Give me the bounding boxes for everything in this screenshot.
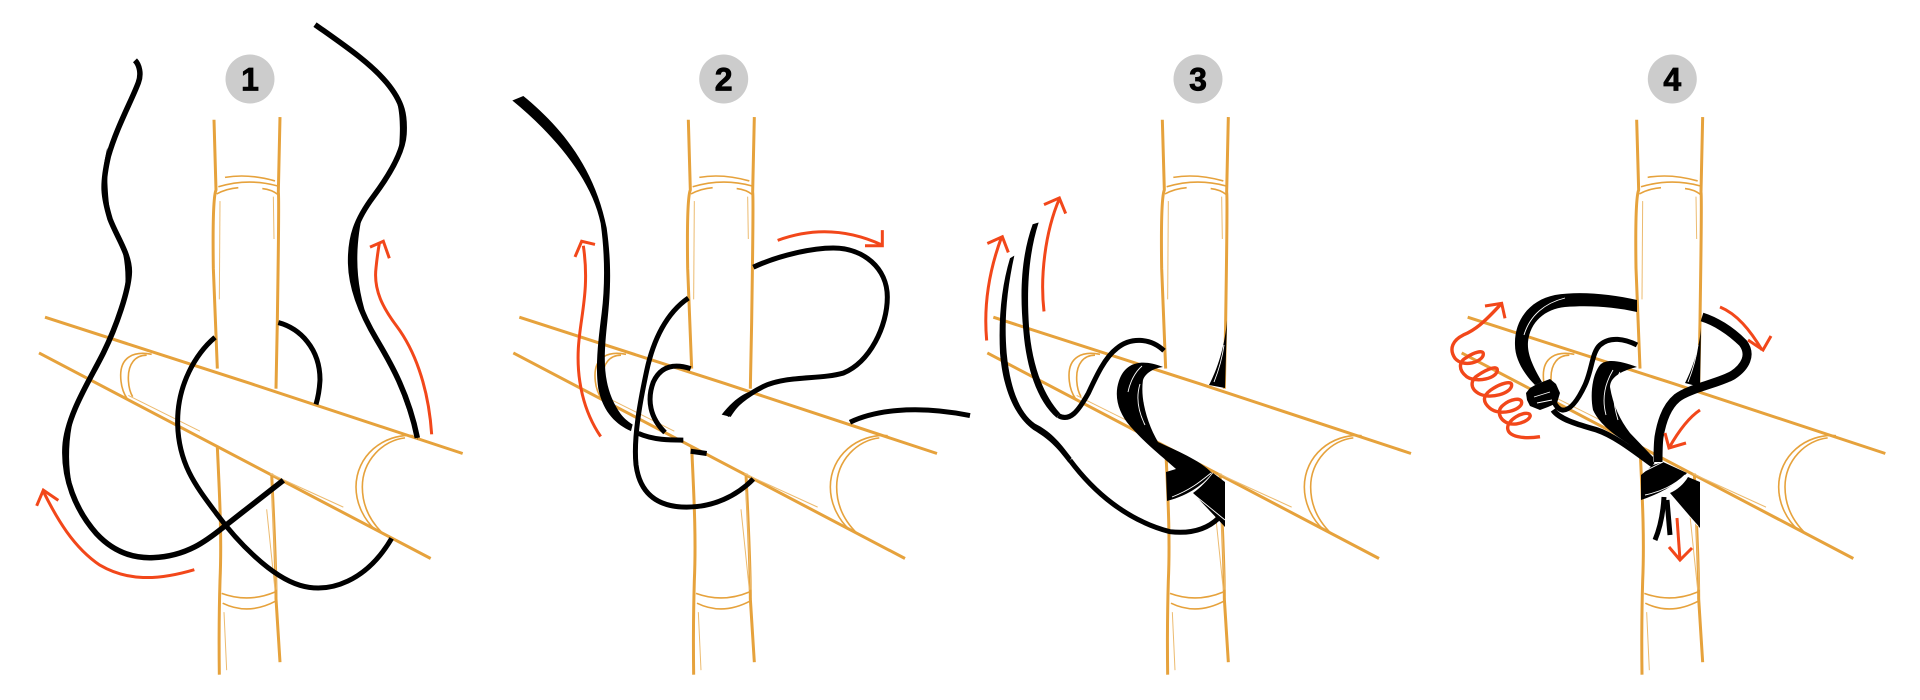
- arrows: direction of pull: [986, 198, 1066, 340]
- bamboo poles: [1462, 117, 1885, 675]
- bamboo poles: [987, 117, 1411, 675]
- panel: step 4: [1452, 54, 1885, 675]
- arrows: direction of pull: [1665, 307, 1771, 560]
- arrows: direction of pull: [575, 230, 882, 437]
- step number badge 1: 1: [241, 62, 259, 98]
- rope: wraps around the joint: [1117, 320, 1227, 527]
- step number badge 4: 4: [1663, 62, 1681, 98]
- arrows: direction of pull: [37, 241, 432, 578]
- coil arrow: [1452, 303, 1540, 438]
- step number badge 3: [1174, 54, 1222, 104]
- panel: step 2: [512, 54, 970, 675]
- rope: lashing strands: [512, 96, 970, 507]
- step number badge 1: [226, 54, 274, 104]
- panel: step 1: [37, 25, 463, 675]
- step number badge 2: 2: [715, 62, 733, 98]
- rope: free strands: [1000, 223, 1218, 532]
- bamboo poles: [39, 117, 463, 675]
- step number badge 4: [1648, 54, 1697, 104]
- bamboo poles: [513, 117, 937, 675]
- step number badge 3: 3: [1189, 62, 1207, 98]
- panel: step 3: [986, 54, 1411, 675]
- rope: lashing strands: [63, 25, 418, 588]
- step number badge 2: [699, 54, 748, 104]
- rope: finished lashing and knot: [1515, 293, 1747, 540]
